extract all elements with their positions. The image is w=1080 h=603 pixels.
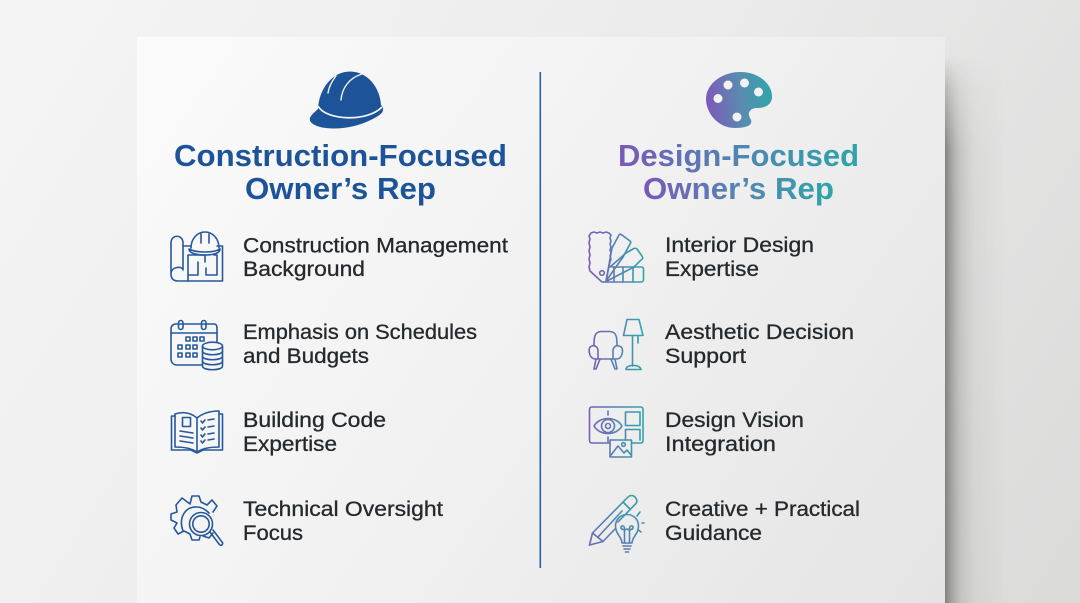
paper sheet (137, 37, 945, 603)
text: Creative + Practical (665, 498, 860, 521)
text (243, 234, 508, 281)
text: Guidance (665, 522, 762, 545)
text: Integration (665, 433, 776, 456)
icon: armchair and floor lamp (589, 320, 643, 370)
item: design vision integration (590, 407, 804, 457)
icon: pencil and light bulb (590, 496, 644, 552)
text: Background (243, 258, 365, 281)
paper shadow (945, 60, 980, 603)
text: Expertise (243, 433, 337, 456)
panel: design-focused (589, 72, 860, 552)
text: and Budgets (243, 345, 369, 368)
text: Focus (243, 522, 303, 545)
item: technical oversight focus (171, 496, 443, 545)
text (243, 498, 443, 545)
heading: construction-focused owner's rep (174, 138, 507, 206)
heading: design-focused owner's rep (618, 138, 859, 206)
item: construction management background (171, 232, 508, 281)
icon: gear and magnifier (171, 496, 223, 545)
heading: design-focused owner's rep: Owner’s Rep (643, 171, 834, 206)
item: creative and practical guidance (590, 496, 860, 552)
text: Interior Design (665, 234, 814, 257)
panel: construction-focused (171, 72, 508, 545)
item: aesthetic decision support (589, 320, 854, 370)
text: Support (665, 345, 746, 368)
text: Aesthetic Decision (665, 321, 854, 344)
text (243, 409, 386, 456)
text: Construction Management (243, 234, 508, 258)
item: building code expertise (172, 409, 386, 456)
heading: design-focused owner's rep: Design-Focused (618, 138, 859, 173)
text: Building Code (243, 409, 386, 432)
icon: hard hat (310, 72, 383, 128)
text (665, 234, 814, 281)
text: Expertise (665, 258, 759, 281)
text (243, 321, 477, 368)
icon: calendar and coins (171, 320, 222, 370)
icon: open code book (172, 411, 222, 453)
center divider (540, 72, 541, 568)
icon: eye and moodboard (590, 407, 643, 457)
heading: construction-focused owner's rep: Construction-Focused (174, 138, 507, 173)
icon: blueprint with helmet (171, 232, 222, 281)
text: Technical Oversight (243, 498, 443, 521)
text (665, 321, 854, 368)
icon: swatch fan (589, 232, 644, 282)
heading: construction-focused owner's rep: Owner’s Rep (245, 171, 436, 206)
text: Emphasis on Schedules (243, 321, 477, 344)
text (665, 498, 860, 545)
text (665, 409, 804, 456)
icon: paint palette (706, 72, 772, 128)
text: Design Vision (665, 409, 804, 432)
item: interior design expertise (589, 232, 814, 282)
item: schedules and budgets (171, 320, 477, 370)
